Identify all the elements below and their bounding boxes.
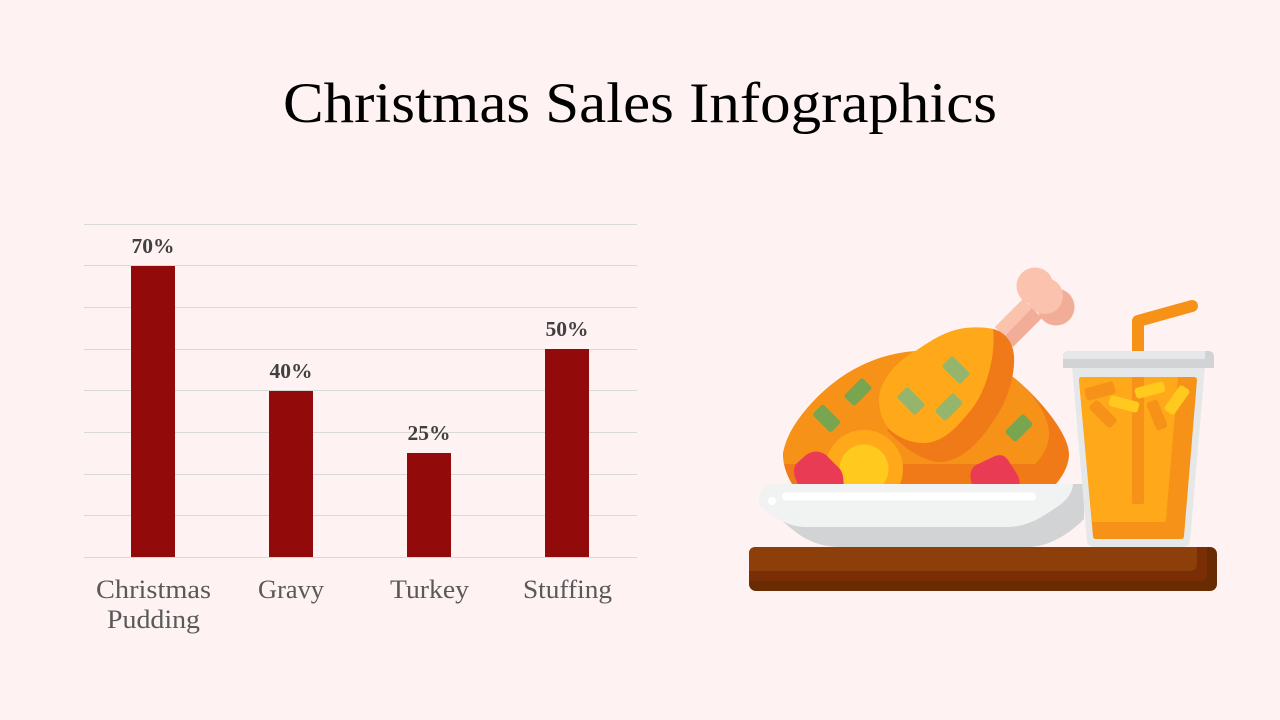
value labels: 50% <box>546 317 588 341</box>
category labels <box>96 575 612 634</box>
herbs <box>812 378 1033 442</box>
thigh <box>887 329 1014 462</box>
icon: tray <box>749 547 1217 591</box>
turkey body <box>783 351 1069 484</box>
category labels: Pudding <box>107 605 200 634</box>
illustration: roast turkey and drink on tray <box>749 268 1217 591</box>
value labels <box>132 234 588 445</box>
title: Christmas Sales Infographics <box>283 72 997 135</box>
value labels: 70% <box>132 234 174 258</box>
category labels: Gravy <box>258 575 324 604</box>
category labels: Stuffing <box>523 575 612 604</box>
drink liquid <box>1079 377 1197 539</box>
ice <box>1084 381 1191 431</box>
icon: drumstick bone <box>995 268 1074 347</box>
cranberries <box>794 452 844 484</box>
lid <box>1063 351 1214 368</box>
value labels: 40% <box>270 359 312 383</box>
icon: drink <box>1063 306 1214 547</box>
stuffing <box>828 430 903 484</box>
cup <box>1072 366 1205 547</box>
straw <box>1138 306 1192 352</box>
bar: Stuffing <box>545 349 589 557</box>
category labels: Turkey <box>390 575 469 604</box>
value labels: 25% <box>408 421 450 445</box>
category labels: Christmas <box>96 575 211 604</box>
bar: Christmas Pudding <box>131 266 175 557</box>
bar chart <box>84 224 637 634</box>
bar: Gravy <box>269 391 313 557</box>
icon: turkey <box>783 327 1069 484</box>
bar: Turkey <box>407 453 451 557</box>
icon: plate <box>759 484 1084 547</box>
